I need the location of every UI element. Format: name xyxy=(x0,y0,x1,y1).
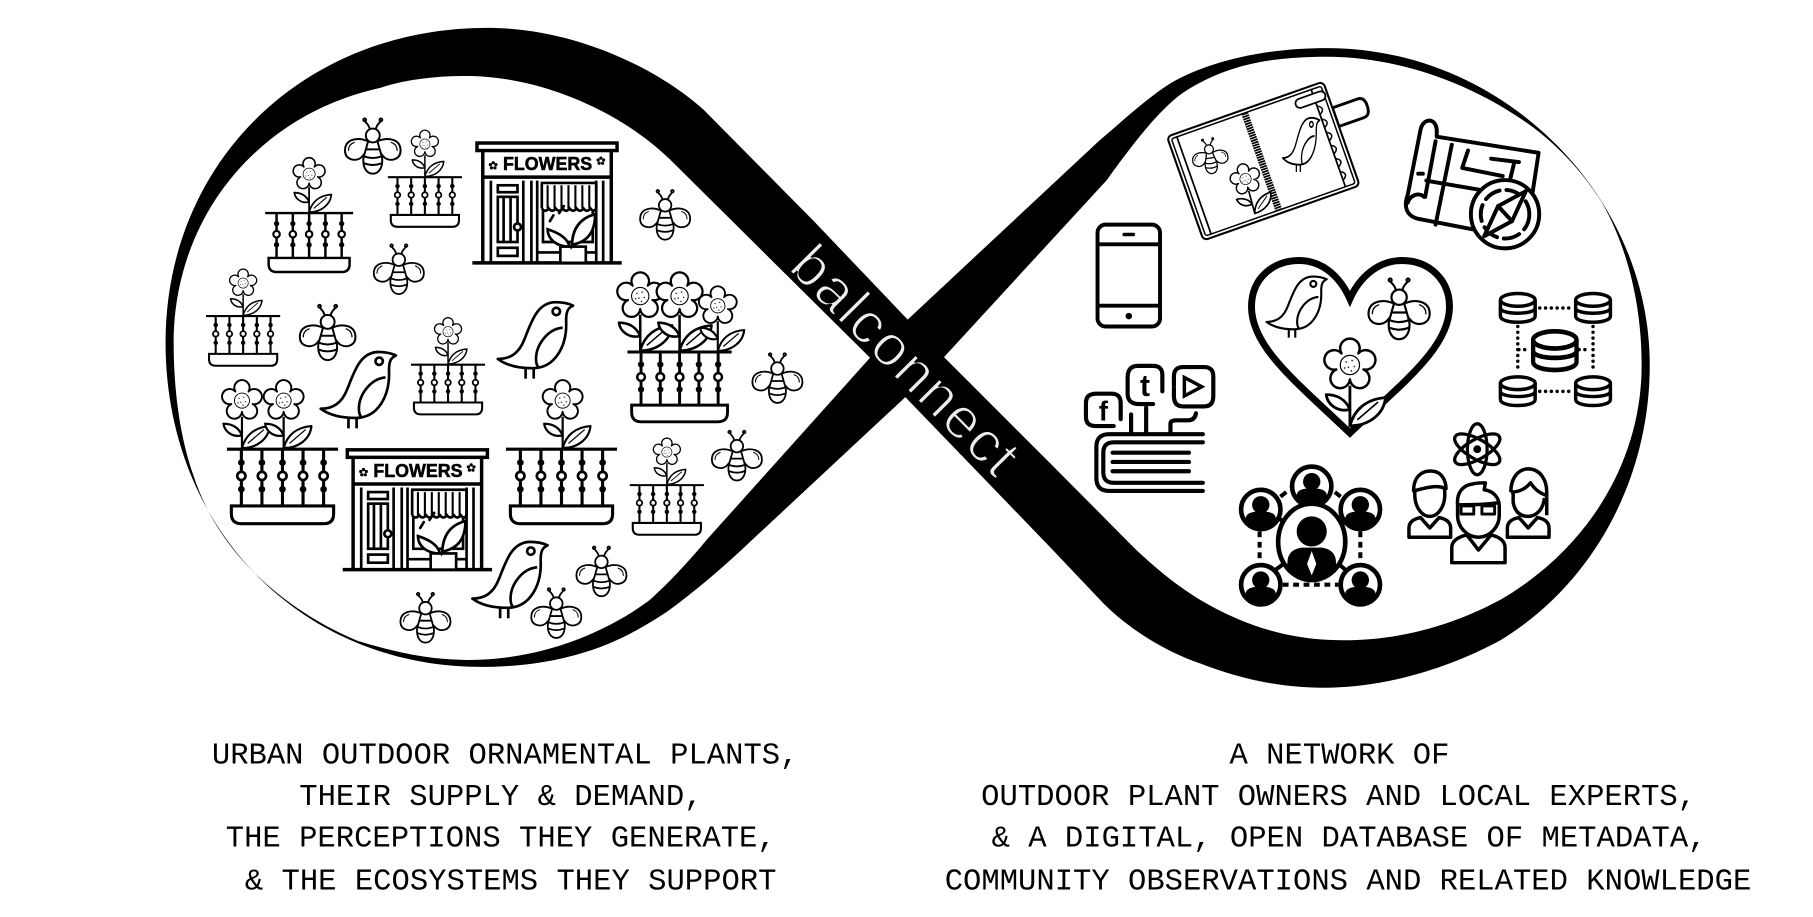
icon: social media book xyxy=(1086,366,1213,491)
panel: left lobe urban plants xyxy=(206,118,802,643)
icon: flower shop: FLOWERS xyxy=(503,153,592,174)
icon: connected databases xyxy=(1500,294,1610,406)
icon: bee xyxy=(300,305,355,360)
icon: balcony planter xyxy=(411,318,485,414)
infinity band with two lobes xyxy=(166,28,1650,688)
icon: bird xyxy=(472,542,548,618)
caption: left xyxy=(212,739,798,900)
icon: bee xyxy=(345,118,401,174)
icon: social media book: t xyxy=(1140,370,1150,403)
icon: bee xyxy=(531,588,581,638)
icon: people network xyxy=(1241,467,1380,604)
icon: balcony planter with three flowers xyxy=(617,272,744,422)
caption: left: THEIR SUPPLY & DEMAND, xyxy=(299,781,703,815)
icon: social media book: f xyxy=(1099,395,1109,426)
icon: flower shop xyxy=(472,143,622,263)
icon: bee xyxy=(752,353,802,403)
icon: heart with bird, bee and flower xyxy=(1252,261,1449,433)
icon: balcony planter xyxy=(206,269,280,366)
icon: map with compass xyxy=(1406,121,1539,248)
caption: right: COMMUNITY OBSERVATIONS AND RELATED KNOWLEDGE xyxy=(945,866,1751,900)
icon: smartphone xyxy=(1098,225,1160,327)
icon: flower shop: FLOWERS xyxy=(373,460,463,481)
icon: bee xyxy=(712,431,762,480)
caption: left: URBAN OUTDOOR ORNAMENTAL PLANTS, xyxy=(212,739,798,773)
brand name on band: balconnect xyxy=(778,233,1032,488)
icon: bee xyxy=(400,593,450,643)
icon: notebook xyxy=(1167,71,1391,240)
icon: balcony planter xyxy=(388,130,462,227)
caption: left: THE PERCEPTIONS THEY GENERATE, xyxy=(226,823,776,857)
icon: bee xyxy=(640,190,690,240)
panel: right lobe network and data xyxy=(1086,71,1610,604)
icon: flower shop xyxy=(343,450,492,570)
icon: bird xyxy=(321,352,396,428)
icon: balcony planter xyxy=(630,438,704,535)
icon: balcony planter xyxy=(506,380,617,524)
caption: right: A NETWORK OF xyxy=(1230,739,1449,773)
icon: balcony planter with two flowers xyxy=(222,380,338,524)
caption: right: OUTDOOR PLANT OWNERS AND LOCAL EXPERTS, xyxy=(981,781,1696,815)
caption: right xyxy=(945,739,1751,900)
icon: scientists and atom xyxy=(1409,424,1549,563)
caption: left: & THE ECOSYSTEMS THEY SUPPORT xyxy=(245,866,776,900)
icon: balcony planter xyxy=(265,158,353,272)
icon: bee xyxy=(374,244,424,294)
icon: bird xyxy=(498,302,573,379)
icon: bee xyxy=(576,547,626,596)
caption: right: & A DIGITAL, OPEN DATABASE OF METADATA, xyxy=(992,823,1707,857)
